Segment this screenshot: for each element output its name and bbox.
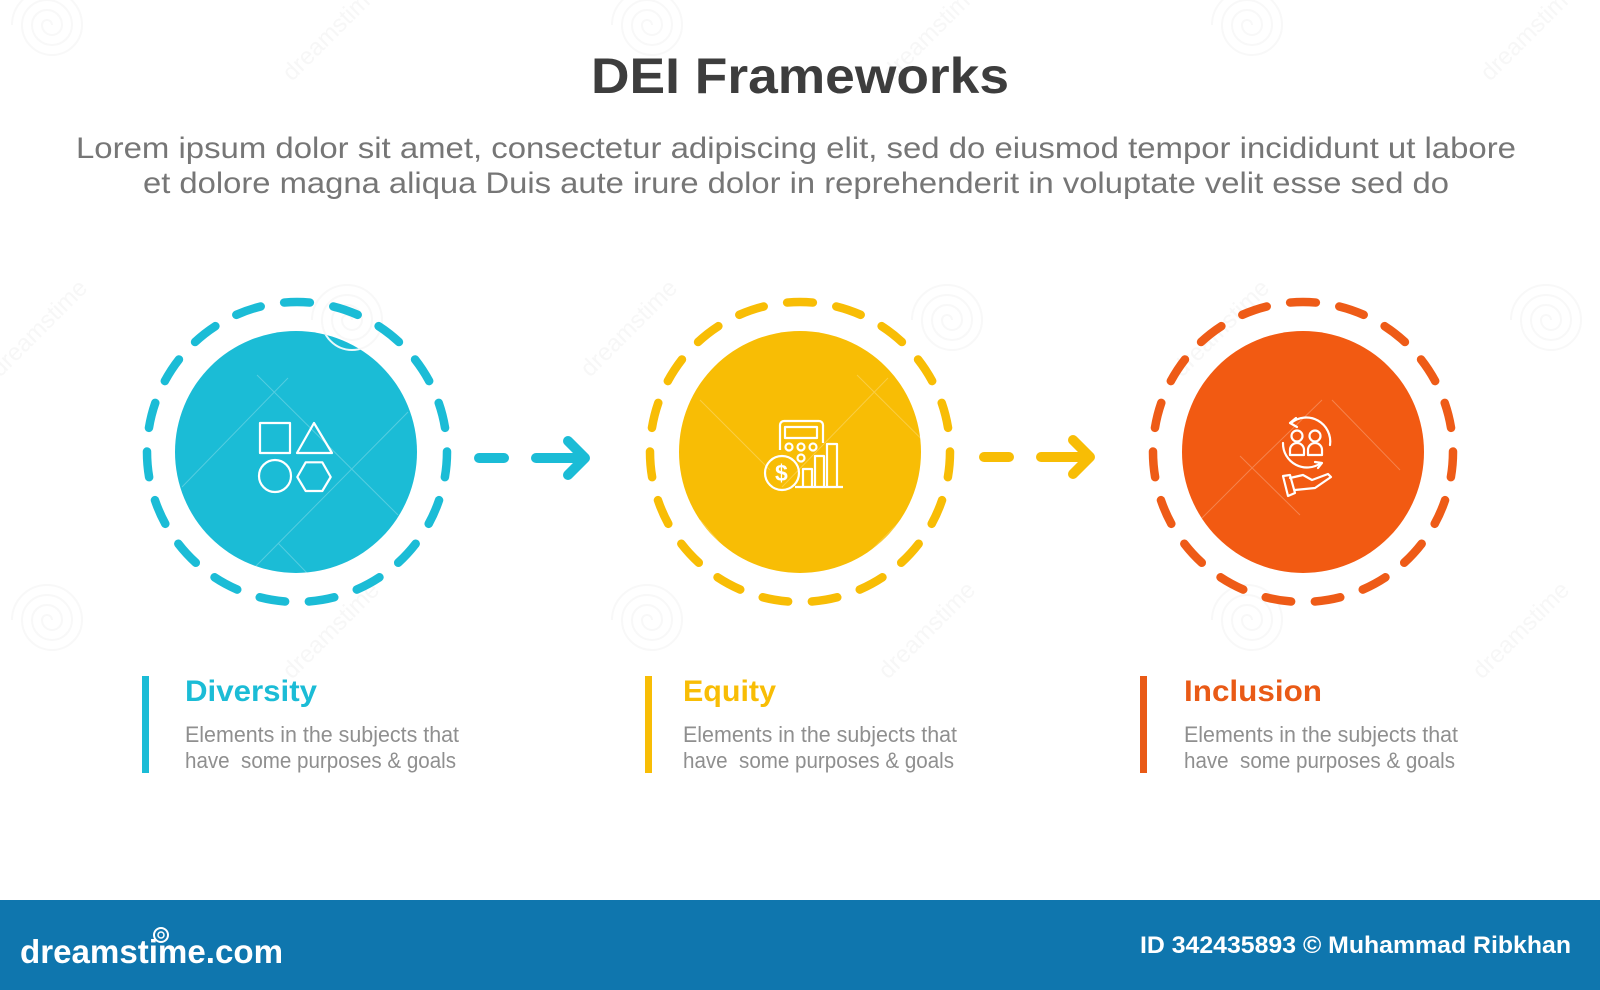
panel: equity circle	[646, 298, 954, 606]
arrow: diversity to equity	[479, 441, 585, 475]
heading: diversity: Diversity	[185, 675, 317, 708]
dashed ring: inclusion	[1153, 302, 1453, 602]
text block: diversity	[142, 675, 459, 773]
watermark pattern: dreamstime	[873, 576, 981, 684]
icon: people in cycle on hand	[1283, 418, 1331, 496]
panel: inclusion circle	[1153, 302, 1453, 602]
filled disc: equity	[679, 331, 921, 573]
accent bar: equity	[645, 676, 652, 773]
icon: shapes	[259, 423, 332, 492]
footer bar	[0, 900, 1600, 990]
accent bar: inclusion	[1140, 676, 1147, 773]
accent bar: diversity	[142, 676, 149, 773]
watermark pattern: dreamstime	[1167, 274, 1275, 382]
filled disc: inclusion	[1182, 331, 1424, 573]
subtitle text	[76, 132, 1516, 200]
icon: calculator with coin and bars: $	[775, 460, 788, 486]
image credit: ID 342435893 © Muhammad Ribkhan	[1140, 932, 1571, 959]
heading: inclusion: Inclusion	[1184, 675, 1322, 708]
watermark pattern: dreamstime	[1467, 576, 1575, 684]
dashed ring: equity	[650, 302, 950, 602]
watermark pattern: dreamstime	[277, 576, 385, 684]
description: equity	[683, 722, 957, 773]
text block: equity	[645, 675, 957, 773]
title: DEI Frameworks	[591, 48, 1009, 104]
text block: inclusion	[1140, 675, 1458, 773]
watermark lines: diversity	[182, 334, 408, 572]
description: diversity	[185, 722, 459, 773]
arrow: equity to inclusion	[984, 440, 1090, 474]
subtitle text: et dolore magna aliqua Duis aute irure dolor in reprehenderit in voluptate velit esse sed do	[143, 167, 1449, 200]
watermark pattern	[0, 0, 1583, 684]
watermark pattern: dreamstime	[575, 274, 683, 382]
description: equity: have some purposes & goals	[683, 748, 954, 773]
heading: equity: Equity	[683, 675, 776, 708]
logo: dreamstime: dreamstime.com	[20, 933, 283, 970]
panel: diversity circle	[147, 285, 447, 602]
watermark lines: equity	[700, 374, 920, 550]
description: diversity: have some purposes & goals	[185, 748, 456, 773]
watermark lines: inclusion	[1202, 400, 1400, 518]
filled disc: diversity	[175, 331, 417, 573]
description: inclusion: have some purposes & goals	[1184, 748, 1455, 773]
dashed ring: diversity	[147, 302, 447, 602]
subtitle text: Lorem ipsum dolor sit amet, consectetur adipiscing elit, sed do eiusmod tempor incididunt ut labore	[76, 132, 1516, 165]
description: inclusion	[1184, 722, 1458, 773]
footer background	[0, 900, 1600, 990]
description: inclusion: Elements in the subjects that	[1184, 722, 1458, 747]
description: equity: Elements in the subjects that	[683, 722, 957, 747]
description: diversity: Elements in the subjects that	[185, 722, 459, 747]
icon: calculator with coin and bars	[765, 421, 843, 490]
